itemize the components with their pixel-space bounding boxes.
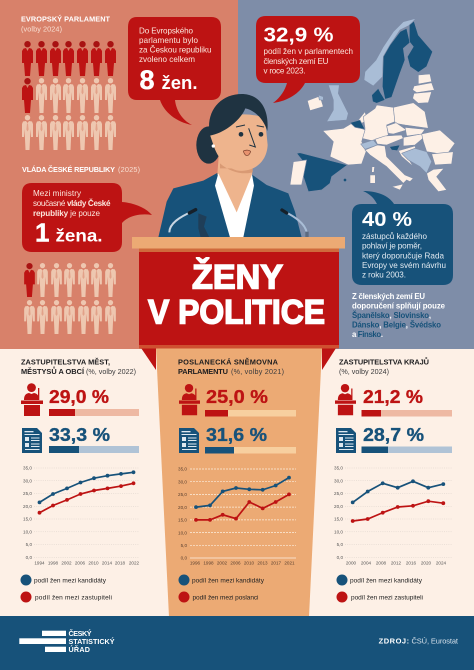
speech bubble: 32.9 %: v roce 2023. [264, 66, 306, 76]
speech bubble: 32.9 %: 32,9 % [264, 24, 334, 46]
line chart: 1996 [190, 560, 201, 566]
icon: woman at lectern [179, 384, 200, 415]
line chart: 15,0 [23, 517, 32, 522]
line chart: 30,0 [178, 479, 187, 484]
speech bubble: 40 %: Evropy ve svém návrhu [362, 261, 446, 270]
title: ŽENY [192, 258, 283, 296]
panel: Chamber of Deputies [178, 358, 296, 602]
legend: podíl žen mezi kandidáty [34, 578, 107, 584]
footer band [0, 616, 474, 670]
speech bubble: 40 %: zástupců každého [362, 232, 427, 241]
speech bubble: 32.9 %: podíl žen v parlamentech [264, 47, 353, 56]
legend: podíl žen mezi zastupiteli [35, 594, 112, 602]
stat: candidates 28.7 % [362, 424, 452, 453]
speech bubble: 40 %: který doporučuje Rada [362, 251, 444, 260]
text: countries meeting the recommendation: Dánsko, Belgie, Švédsko [352, 320, 441, 330]
pictogram: European Parliament, 8 women out of 21 [22, 41, 116, 150]
speech bubble: 8 women: 8 [140, 65, 155, 95]
logo: Czech Statistical Office: ČESKÝ [68, 629, 92, 638]
logo: Czech Statistical Office: ÚŘAD [68, 645, 90, 654]
heading [178, 358, 284, 376]
line chart: 2006 [75, 560, 86, 566]
woman speaker illustration [158, 94, 309, 238]
line chart: 2010 [88, 560, 99, 566]
heading: PARLAMENTU [178, 367, 228, 376]
heading: POSLANECKÁ SNĚMOVNA [178, 358, 279, 366]
speech bubble: 1 woman: 1 [35, 218, 49, 248]
logo: Czech Statistical Office: STATISTICKÝ [68, 637, 115, 646]
speech bubble: 40 %: pohlaví je poměr, [362, 242, 422, 251]
line chart: 0,0 [337, 555, 343, 560]
line chart: 2024 [436, 560, 447, 566]
heading: (%, volby 2024) [339, 367, 389, 376]
line chart: 0,0 [26, 555, 32, 560]
lectern with title [132, 237, 345, 348]
line chart: 25,0 [178, 492, 187, 497]
icon: candidate list [179, 428, 199, 453]
title [148, 258, 325, 332]
heading: Czech government: (2025) [118, 165, 140, 174]
line chart: 2008 [376, 560, 387, 566]
text: countries meeting the recommendation: a Finsko. [352, 330, 383, 339]
speech bubble: 8 women: zvoleno celkem [139, 55, 195, 64]
line chart: 2002 [61, 560, 72, 566]
heading: European Parliament: (volby 2024) [21, 24, 62, 34]
heading: ZASTUPITELSTVA MĚST, [21, 358, 110, 366]
stat: candidates 31.6 % [205, 424, 296, 454]
line chart: 2010 [244, 560, 255, 566]
line chart: 10,0 [334, 530, 343, 534]
legend: podíl žen mezi poslanci [192, 594, 258, 602]
speech bubble: 40 %: 40 % [362, 208, 412, 231]
icon: woman at lectern [335, 384, 356, 415]
text: countries meeting the recommendation [352, 292, 446, 339]
line chart: 25,0 [334, 491, 343, 496]
line chart: 2014 [102, 560, 113, 566]
line chart: 1994 [34, 560, 45, 566]
line chart: 1998 [48, 560, 59, 566]
source: ČSÚ, Eurostat [412, 636, 459, 646]
speech bubble: 8 women: Do Evropského [139, 26, 193, 36]
line chart: 20,0 [23, 504, 32, 509]
panel: municipal councils [20, 358, 140, 602]
line chart: 30,0 [23, 478, 32, 483]
heading: European Parliament [21, 14, 111, 34]
text: countries meeting the recommendation: Španělsko, Slovinsko, [352, 311, 431, 320]
line chart: 20,0 [178, 505, 187, 510]
text: countries meeting the recommendation: doporučení splňují pouze [352, 302, 446, 310]
line chart: 25,0 [23, 491, 32, 496]
speech bubble: 40 % [352, 191, 453, 285]
line chart: 2002 [217, 560, 228, 566]
heading: (%, volby 2022) [86, 367, 136, 376]
line chart: 2017 [271, 560, 282, 566]
line chart: 2006 [230, 560, 241, 566]
speech bubble: 1 woman: republiky je pouze [33, 209, 100, 218]
line chart: 2004 [361, 560, 372, 566]
source [379, 636, 459, 646]
line chart: 2016 [406, 560, 417, 566]
heading [21, 358, 136, 376]
speech bubble: 32.9 % [256, 16, 360, 103]
line chart: 35,0 [178, 467, 187, 472]
legend: podíl žen mezi kandidáty [192, 578, 265, 584]
heading: (%, volby 2021) [231, 367, 284, 376]
line chart: 35,0 [334, 466, 343, 471]
logo: Czech Statistical Office [19, 629, 115, 654]
line chart: 2000 [346, 560, 357, 566]
icon: candidate list [336, 428, 356, 453]
speech bubble: 32.9 %: členských zemí EU [264, 57, 329, 66]
line chart [334, 466, 452, 566]
line chart: 30,0 [334, 478, 343, 483]
central orange panel [156, 348, 322, 617]
line chart: 10,0 [23, 530, 32, 534]
icon: woman at lectern [21, 383, 43, 416]
line chart: 2012 [391, 560, 402, 566]
line chart: 2022 [129, 560, 140, 566]
line chart: 15,0 [334, 517, 343, 522]
stat: elected 25.0 %: 25,0 % [206, 386, 268, 407]
speech bubble: 8 women: za Českou republiku [139, 46, 212, 54]
speech bubble: 8 women [128, 17, 221, 125]
line chart: 5,0 [181, 543, 187, 548]
legend [336, 574, 423, 602]
line chart: 2020 [421, 560, 432, 566]
heading: MĚSTYSŮ A OBCÍ [21, 366, 85, 376]
heading: ZASTUPITELSTVA KRAJŮ [339, 356, 429, 366]
panel: regional councils [334, 356, 452, 602]
heading: European Parliament: EVROPSKÝ PARLAMENT [21, 14, 111, 24]
line chart: 10,0 [178, 530, 187, 535]
line chart: 15,0 [178, 518, 187, 523]
line chart: 2018 [115, 560, 126, 566]
line chart: 5,0 [337, 542, 343, 547]
heading: Czech government: VLÁDA ČESKÉ REPUBLIKY [22, 165, 115, 174]
pictogram: government, 1 woman out of 14 [24, 263, 116, 334]
legend [20, 574, 112, 602]
legend: podíl žen mezi kandidáty [350, 578, 423, 584]
speech bubble: 1 woman: současné vlády České [33, 199, 111, 208]
speech bubble: 8 women: parlamentu bylo [139, 36, 198, 45]
stat: candidates 31.6 %: 31,6 % [206, 424, 267, 445]
line chart: 2013 [257, 560, 268, 566]
line chart: 2021 [284, 560, 295, 566]
red corner folds [139, 345, 338, 370]
stat: candidates 28.7 %: 28,7 % [363, 424, 424, 445]
line chart: 20,0 [334, 504, 343, 509]
heading [339, 356, 429, 376]
speech bubble: 8 women: žen. [162, 72, 198, 93]
line chart: 0,0 [181, 556, 187, 561]
stat: candidates 33.3 %: 33,3 % [49, 424, 110, 445]
line chart: 35,0 [23, 466, 32, 471]
line chart: 5,0 [26, 542, 32, 547]
legend: podíl žen mezi zastupiteli [351, 594, 423, 602]
legend [178, 574, 265, 602]
speech bubble: 1 woman: Mezi ministry [33, 189, 82, 198]
text: countries meeting the recommendation: Z členských zemí EU [352, 292, 425, 301]
speech bubble: 40 %: z roku 2003. [362, 270, 406, 280]
stat: elected 29.0 % [49, 386, 139, 416]
line chart [23, 466, 140, 566]
speech bubble: 1 woman [22, 183, 152, 252]
map of Europe [290, 18, 455, 192]
stat: elected 21.2 %: 21,2 % [363, 386, 423, 407]
line chart: 1998 [203, 560, 214, 566]
stat: elected 29.0 %: 29,0 % [49, 386, 109, 407]
speech bubble: 1 woman: žena. [56, 226, 102, 246]
stat: elected 25.0 % [205, 386, 296, 416]
line chart [178, 467, 296, 566]
icon: candidate list [22, 428, 42, 453]
stat: candidates 33.3 % [49, 424, 139, 453]
title: V POLITICE [148, 294, 325, 332]
source: ZDROJ: [379, 636, 409, 646]
stat: elected 21.2 % [362, 386, 452, 416]
